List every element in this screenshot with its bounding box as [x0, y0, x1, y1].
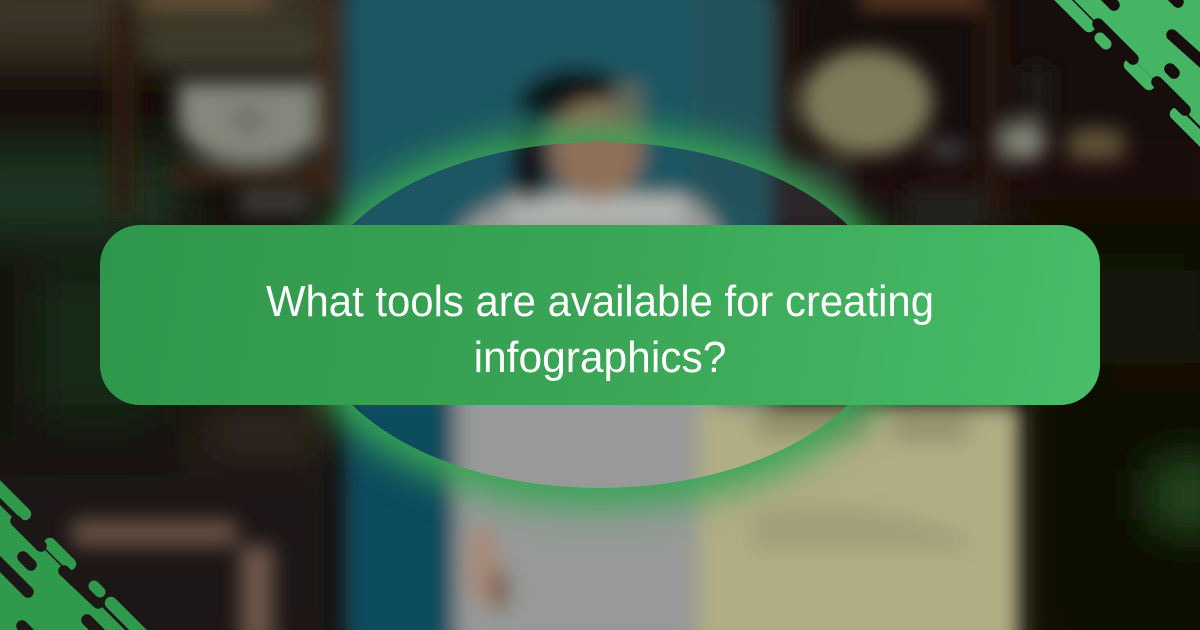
title: What tools are available for creating — [266, 278, 934, 326]
teal wall — [345, 0, 773, 630]
title — [266, 278, 934, 382]
shelves right — [772, 0, 792, 220]
top-right corner graphic — [1054, 0, 1200, 147]
green glowing ellipse ring — [310, 142, 890, 488]
person — [455, 195, 720, 630]
title banner — [100, 225, 1100, 405]
shelves left — [112, 0, 134, 215]
poster — [698, 405, 1020, 630]
title: infographics? — [474, 334, 726, 382]
bottom-left corner graphic — [0, 480, 147, 630]
chair — [72, 520, 237, 546]
